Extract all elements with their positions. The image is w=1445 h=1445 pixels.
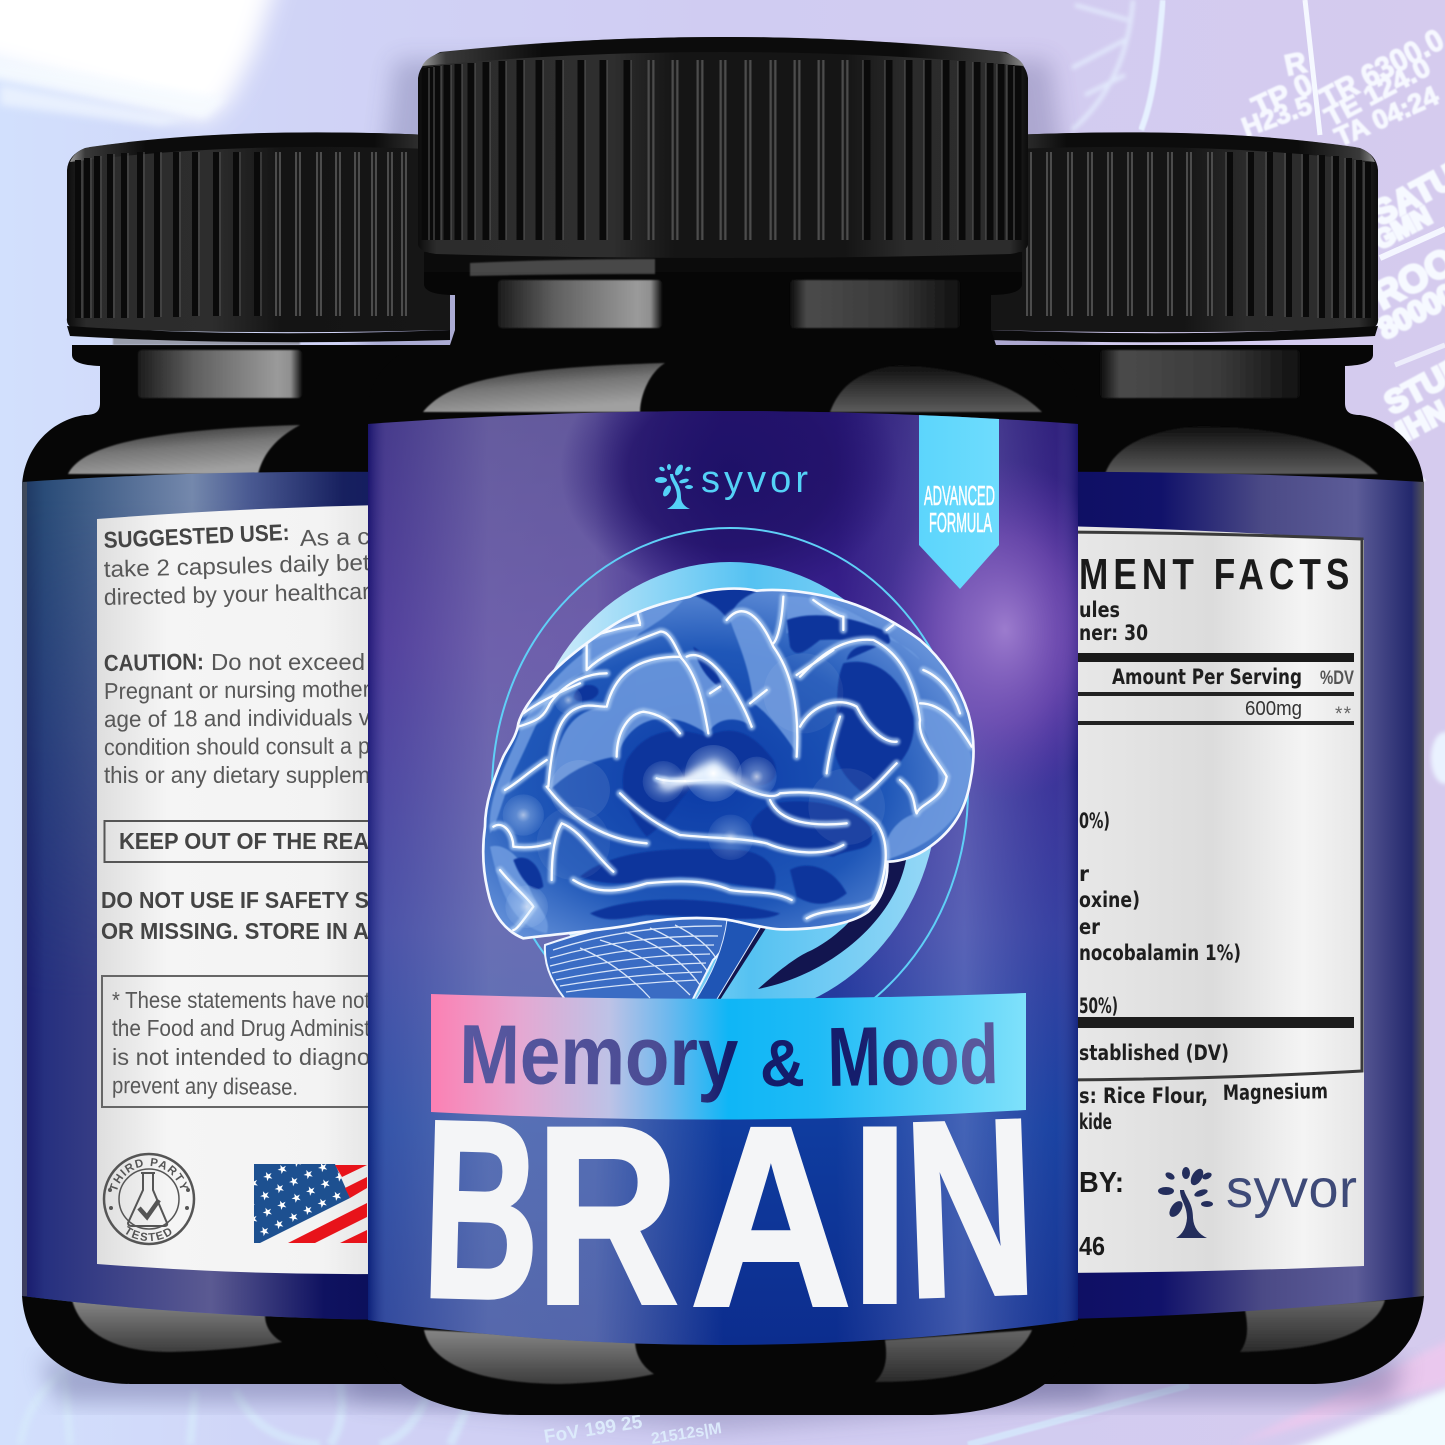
distributed by: [1079, 1167, 1124, 1261]
left bottle neck highlights: [113, 335, 302, 398]
caution text: [104, 648, 371, 788]
ingredient lines: nocobalamin 1%): [1079, 941, 1241, 965]
right bottle shoulder highlight: [1105, 426, 1378, 474]
supplement facts box outline: [1060, 532, 1362, 1080]
lobes: light rims: [490, 596, 973, 933]
keep out of reach box: KEEP OUT OF THE REA: [119, 828, 369, 854]
dark sulci: [513, 588, 914, 919]
facts table header: **: [1335, 704, 1352, 725]
center bottle: [368, 37, 1078, 1415]
facts table header: Amount Per Serving: [1112, 665, 1302, 689]
background MRI readout text top right: H23.5: [1238, 90, 1316, 143]
headline band: memory and mood: Mood: [827, 1007, 999, 1104]
caution text: Pregnant or nursing mother: [104, 676, 370, 704]
ingredient lines: 50%): [1079, 994, 1118, 1018]
right bottle: supplement facts side: [990, 132, 1424, 1384]
product title: BRAIN: A: [690, 1073, 852, 1359]
ingredient lines: [1079, 809, 1241, 1018]
FDA disclaimer box: is not intended to diagno: [112, 1044, 370, 1070]
right bottle cap: [990, 132, 1378, 342]
icon: american flag: ★ ★ ★ ★ ★ ★ ★ ★ ★: [231, 1125, 363, 1199]
icon: american flag: ★ ★ ★ ★ ★ ★ ★ ★ ★: [245, 1153, 378, 1228]
headline band: memory and mood: Memory: [459, 1007, 739, 1103]
pale inner rim: [803, 962, 1294, 1312]
icon: american flag: ★ ★ ★ ★ ★ ★ ★ ★ ★: [257, 1166, 389, 1240]
brain illustration: [482, 587, 975, 999]
other ingredients: Magnesium: [1223, 1079, 1328, 1105]
cap collar band: [424, 252, 1022, 272]
product title: BRAIN: [430, 1118, 1028, 1307]
other ingredients: s: Rice Flour,: [1079, 1084, 1208, 1108]
left bottle cap: [67, 132, 450, 342]
keep out of reach box: [104, 821, 384, 862]
suggested use text: take 2 capsules daily bet: [103, 549, 371, 582]
background MRI readout text top right: TP 0: [1247, 68, 1318, 124]
suggested use text: SUGGESTED USE:: [103, 519, 290, 553]
syvor logo dark: syvor: [1226, 1159, 1357, 1219]
left bottle bottom gloss: [72, 1300, 282, 1352]
background MRI readout text right edge: [1366, 157, 1445, 496]
caution text: Do not exceed: [211, 649, 365, 675]
caution text: CAUTION:: [104, 648, 204, 676]
icon: american flag: ★ ★ ★ ★ ★ ★ ★ ★ ★: [259, 1182, 392, 1256]
safety seal warning: DO NOT USE IF SAFETY S: [101, 887, 369, 913]
ingredient lines: er: [1079, 915, 1101, 939]
icon: third party tested badge: THIRD PARTY: [110, 1158, 188, 1190]
facts table header: [1060, 653, 1354, 725]
ribbon: advanced formula: [919, 405, 999, 589]
icon: third party tested badge: [102, 1152, 196, 1246]
caution text: age of 18 and individuals v: [104, 704, 371, 732]
caution text: condition should consult a p: [104, 733, 370, 760]
background MRI readout text right edge: GMN: [1369, 200, 1436, 255]
serving info: ner: 30: [1079, 621, 1148, 645]
background MRI readout text top right: TA 04:24: [1330, 80, 1443, 152]
right white panel: [1060, 526, 1364, 1273]
right bottle bottom gloss: [1240, 1300, 1385, 1352]
headline band: memory and mood: [431, 993, 1026, 1120]
cerebellum: [545, 917, 760, 1005]
right bottle label: [1000, 472, 1424, 1320]
FDA disclaimer box: * These statements have not: [112, 987, 371, 1013]
brain outer contour: [483, 589, 974, 938]
center bottle shoulder highlights: [423, 363, 1042, 412]
front label: ADVANCED: [924, 480, 995, 511]
product title: BRAIN: N: [901, 1067, 1040, 1351]
FDA disclaimer box: the Food and Drug Administ: [112, 1015, 371, 1041]
brand logo syvor: syvor: [701, 459, 808, 501]
right bottle neck highlight: [1100, 350, 1300, 398]
background MRI readout text top right: R: [1282, 46, 1310, 83]
facts table header: 600mg: [1245, 698, 1302, 720]
ribbon: advanced formula: FORMULA: [929, 507, 992, 538]
background MRI readout text right edge: A: [1393, 457, 1427, 496]
brand logo syvor: [655, 464, 808, 509]
ingredient lines: oxine): [1079, 888, 1140, 912]
facts table header: %DV: [1320, 668, 1354, 689]
serving info: [1079, 598, 1148, 645]
center bottle body: [368, 272, 1078, 1415]
suggested use text: As a c: [299, 523, 370, 551]
center bottle bottom gloss: [424, 1330, 1032, 1384]
center bottle collar highlight: [470, 259, 655, 276]
dark crescent: [758, 860, 906, 989]
icon: third party tested badge: TESTED: [126, 1226, 172, 1241]
left bottle body: [22, 345, 460, 1384]
brain shading and folds: [482, 587, 976, 940]
daily value footnote: [1060, 1017, 1354, 1065]
icon: american flag: ★ ★ ★ ★ ★ ★ ★ ★ ★: [243, 1137, 375, 1211]
other ingredients: [1079, 1079, 1328, 1134]
ingredient lines: 0%): [1079, 809, 1110, 833]
glowing spots: [503, 653, 885, 928]
cerebrum outline: [483, 589, 974, 938]
central bright streak: [657, 760, 780, 795]
front label: [368, 411, 1078, 1345]
product title: BRAIN: B: [420, 1068, 543, 1354]
background MRI readout text top right: [1238, 22, 1445, 152]
fold glow: [493, 597, 972, 930]
product title: BRAIN: I: [851, 1075, 909, 1356]
other ingredients: kide: [1079, 1110, 1112, 1134]
headline band: memory and mood: &: [760, 1026, 805, 1100]
distributed by: BY:: [1079, 1167, 1124, 1199]
left bottle shoulder highlight: [68, 425, 300, 474]
suggested use text: [103, 519, 371, 610]
FDA disclaimer box: [102, 976, 392, 1107]
product title: BRAIN: R: [536, 1075, 679, 1358]
caution text: this or any dietary supplem: [104, 762, 370, 788]
daily value footnote: stablished (DV): [1079, 1041, 1229, 1065]
syvor logo dark: [1158, 1159, 1357, 1238]
distributed by: 46: [1079, 1231, 1105, 1261]
right bottle body: [990, 345, 1424, 1384]
serving info: ules: [1079, 598, 1120, 622]
suggested use text: directed by your healthcar: [104, 578, 370, 610]
white gyri lines: [493, 597, 972, 930]
thin outer ring arc: [492, 528, 968, 1052]
background MRI readout text top right: TE 124.0: [1320, 52, 1435, 132]
safety seal warning: [101, 887, 369, 944]
safety seal warning: OR MISSING. STORE IN A: [101, 918, 369, 944]
light blue disc behind brain: [553, 562, 932, 999]
background MRI readout text bottom: [542, 1412, 723, 1445]
left white panel: [97, 505, 371, 1274]
FDA disclaimer box: prevent any disease.: [112, 1072, 298, 1100]
ingredient lines: r: [1079, 862, 1090, 886]
left bottle: back label side: [22, 132, 450, 1384]
center bottle neck highlights: [498, 280, 960, 328]
bottle shadows: [350, 60, 1100, 1430]
brainstem: [693, 920, 760, 1004]
left bottle label: [22, 472, 400, 1320]
center bottle cap: [418, 37, 1028, 258]
supplement facts heading: MENT FACTS: [1079, 550, 1349, 599]
